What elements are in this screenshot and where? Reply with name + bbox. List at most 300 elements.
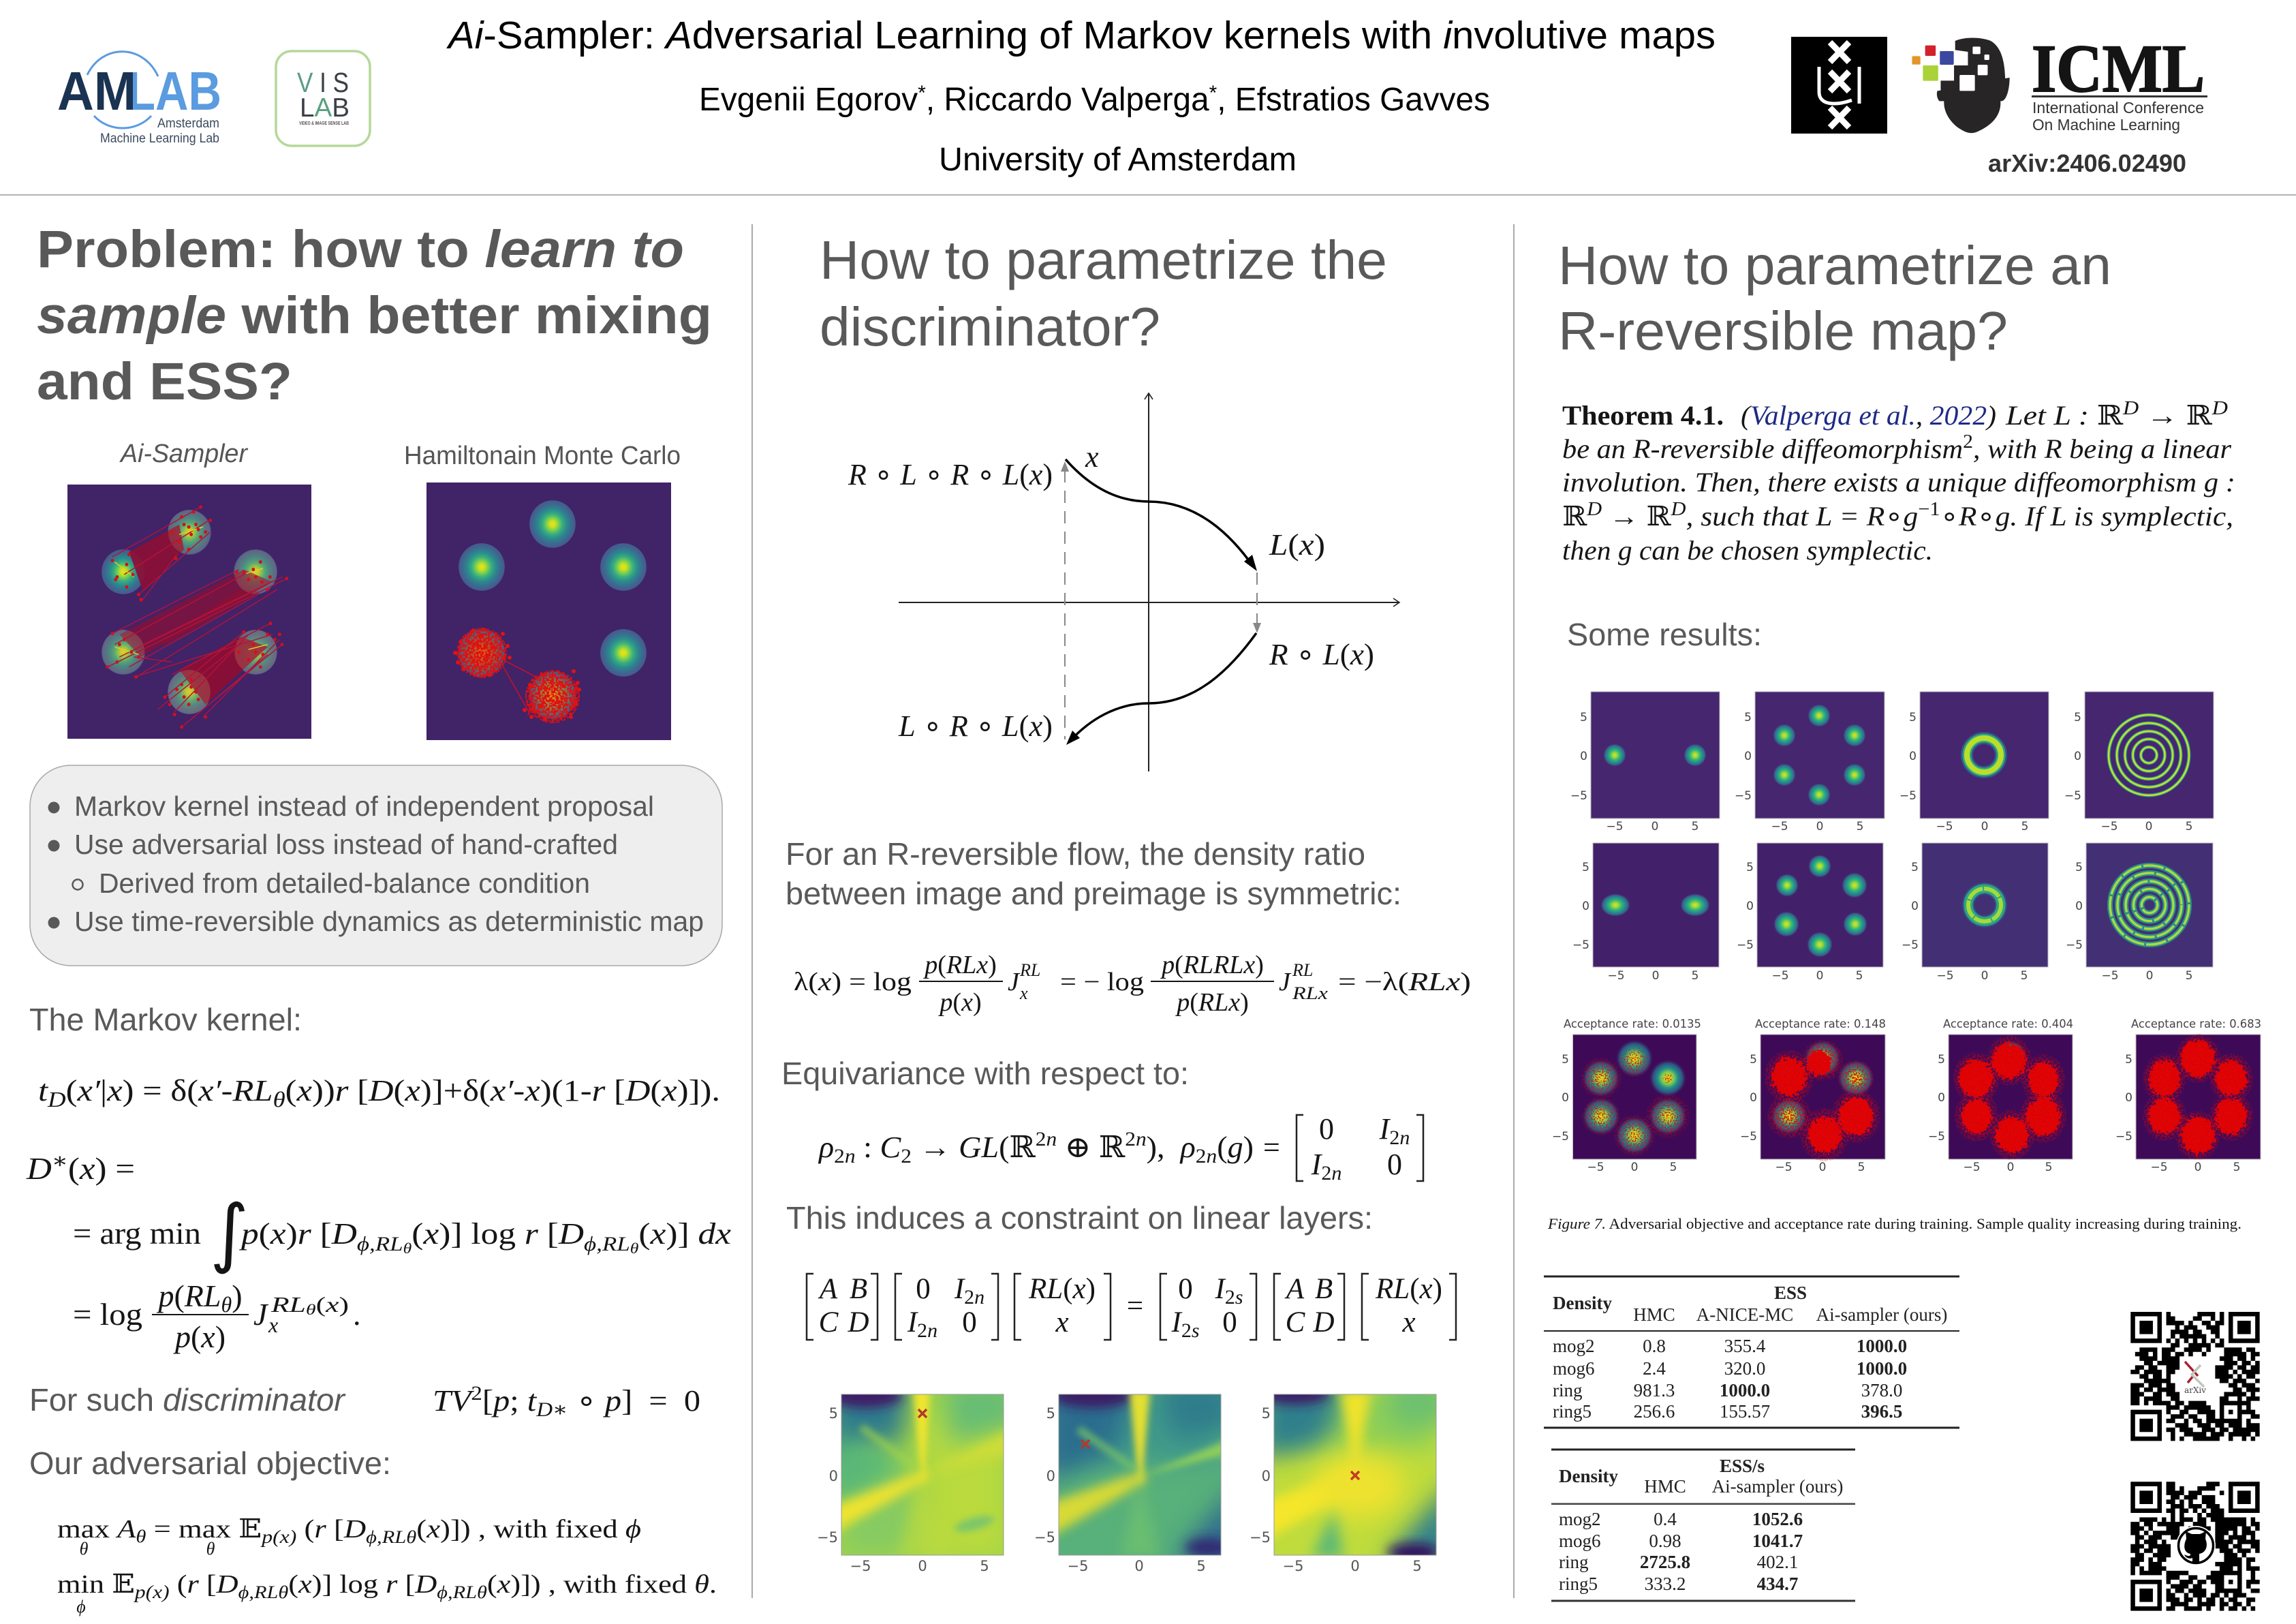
table: ESS: 2.4 [1643,1358,1666,1379]
heading: R-reversible map [1558,235,2111,361]
formula: optimal discriminator: ( [638,1217,651,1251]
table: ESS: 355.4 [1724,1336,1766,1356]
formula: representation: I [1379,1112,1391,1146]
formula: optimal discriminator [26,1148,732,1354]
formula: adversarial objective: r [D [187,1570,235,1599]
formula: adversarial objective: min 𝔼 [57,1570,124,1599]
chart: discriminator heatmap 2: 0 [1134,1558,1144,1574]
table: ESS: HMC [1633,1304,1675,1325]
authors: , Riccardo Valperga [926,82,1209,118]
chart: acceptance rate 0.148: 0 [1819,1161,1826,1174]
chart: target densities (row 1): 0 [1651,820,1658,833]
formula: optimal discriminator: θ [403,1240,412,1257]
diagram: R-reversible flow: L ∘ R ∘ L(x) [898,709,1053,744]
chart: discriminator heatmap 1: 5 [829,1405,838,1422]
logo: ICML wordmark: International Conference [2032,99,2204,117]
chart: target densities (row 1): 0 [1744,750,1752,763]
callout: key ideas: Use adversarial loss instead of hand-crafted [74,829,618,860]
chart: acceptance rate 0.404: 0 [1938,1091,1945,1105]
formula: optimal discriminator: ϕ,RL [584,1233,630,1255]
text: theorem 4.1: ℝ [1562,501,1587,532]
table: ESS per second: ESS/s [1720,1456,1765,1476]
chart: learned densities (row 2): 5 [1582,861,1589,874]
chart: target densities (row 1): −5 [1606,820,1624,833]
chart: target densities (row 1): 5 [1857,820,1863,833]
formula: linear-layer constraint: C [1286,1306,1306,1338]
QR code: GitHub [2130,1482,2260,1611]
caption: figure 7: Figure 7. Adversarial objective and acceptance rate during training. Sample quality increasing during training. [1547,1215,2241,1232]
callout: key ideas: Use time-reversible dynamics as deterministic map [74,906,704,937]
chart: acceptance rate 0.148: 5 [1858,1161,1865,1174]
heading: R-reversible map: How to parametrize an [1558,235,2111,296]
formula: density ratio symmetry: x [1019,983,1028,1003]
formula: optimal discriminator: θ [630,1240,639,1257]
formula: linear-layer constraint: RL(x) [1375,1273,1442,1305]
formula: representation: → [912,1131,959,1164]
formula: adversarial objective: p(x) [134,1582,170,1602]
text: density ratio: between image and preimage is symmetric: [786,876,1401,911]
chart: discriminator heatmap 1 [818,1394,1004,1572]
heading: problem: Problem: how to learn to [37,220,684,279]
chart: target densities (row 1): 5 [2074,711,2081,724]
header [57,14,2207,178]
formula: Markov kernel: D [47,1087,66,1112]
formula: optimal discriminator: x)] dx [651,1217,726,1251]
chart: acceptance rate 0.0135 [1552,1017,1701,1174]
formula: representation: 2n [834,1145,855,1167]
text: theorem 4.1: R∘g. If L is symplectic, [1959,501,2214,532]
formula: Markov kernel: x′|x) = δ( x′-RL [78,1074,268,1107]
formula: adversarial objective: = max 𝔼 [146,1515,262,1544]
formula: representation: 0 [1387,1148,1402,1181]
chart: discriminator heatmap 1: 0 [829,1468,838,1484]
formula: density ratio symmetry: = − log [1060,968,1144,996]
table: ESS: 396.5 [1861,1401,1902,1422]
chart: target densities (row 1) [1570,692,2214,833]
chart: acceptance rate 0.404 [1928,1017,2073,1174]
heading: problem [37,220,712,411]
chart: discriminator heatmap 3: 0 [1262,1468,1271,1484]
logo: VIS LAB: LAB [300,93,350,123]
logo: University of Amsterdam shield [1791,37,1887,134]
chart: learned densities (row 2): 0 [2146,969,2153,983]
chart: Ai-Sampler trajectories [67,485,311,739]
chart: learned densities (row 2): 5 [1692,969,1698,983]
chart: acceptance rate 0.0135: 0 [1562,1091,1569,1105]
text: adversarial objective: Our adversarial objective: [29,1445,391,1481]
chart: target densities (row 1): 0 [1580,750,1587,763]
logo: VIS LAB: VIDEO & IMAGE SENSE LAB [299,120,349,126]
chart: discriminator heatmap 3: 0 [1350,1558,1360,1574]
arXiv id: arXiv:2406.02490 [1988,149,2186,177]
formula: adversarial objective: p(x) [260,1527,296,1547]
heading: discriminator: How to parametrize the [820,230,1387,290]
chart: HMC trajectories [426,482,671,740]
label: Ai-Sampler: Ai-Sampler [119,440,248,468]
table: ESS: A-NICE-MC [1696,1304,1793,1325]
formula: linear-layer constraint: 0 [962,1306,977,1338]
formula: representation: 2n [1125,1128,1146,1150]
chart: acceptance rate 0.0135: 5 [1670,1161,1677,1174]
chart: discriminator heatmap 3: 5 [1262,1405,1271,1422]
panel: problem and kernel (left column) [26,220,732,1617]
formula: linear-layer constraint: 2n [964,1286,984,1308]
formula: total variation: p; t [493,1384,536,1418]
chart: target densities (row 1): 5 [2021,820,2028,833]
text: theorem 4.1: D [1586,499,1602,520]
chart: learned densities (row 2): −5 [2066,938,2083,952]
text: theorem 4.1: then g can be chosen symplectic. [1562,535,1933,566]
chart: target densities (row 1): −5 [2100,820,2118,833]
chart: target densities (row 1): 5 [1909,711,1917,724]
formula: representation: g) [1228,1131,1253,1164]
diagram: R-reversible flow: x [1085,440,1099,474]
table: ESS: mog6 [1553,1358,1595,1379]
title: Ai-Sampler: Adversarial Learning of Markov kernels with involutive maps [446,14,1716,57]
chart: target densities (row 1): 5 [2186,820,2192,833]
chart: target densities (row 1): 0 [2074,750,2081,763]
formula: total variation: ∘ p] = 0 [576,1383,694,1418]
chart: learned densities (row 2): −5 [1607,969,1625,983]
chart: acceptance rate 0.0135: 0 [1631,1161,1638,1174]
table: ESS per second: 2725.8 [1640,1552,1690,1572]
text: theorem 4.1: D [2212,398,2228,419]
label: Hamiltonian Monte Carlo: Hamiltonain Monte Carlo [404,442,681,470]
formula: density ratio symmetry: p(x) [937,988,982,1017]
formula: linear-layer constraint: C [819,1306,839,1338]
diagram: R-reversible flow: R ∘ L ∘ R ∘ L(x) [848,457,1053,492]
table: ESS: ring5 [1553,1401,1592,1422]
formula: linear-layer constraint: 2n [917,1319,937,1342]
authors: Evgenii Egorov [699,82,919,118]
table: ESS [1544,1276,1959,1428]
chart: learned densities (row 2): 0 [1816,969,1823,983]
chart: discriminator heatmap 2: −5 [1068,1558,1088,1574]
logo: VIS LAB [276,51,370,146]
formula: density ratio symmetry: J [1008,968,1021,996]
chart: discriminator heatmap 2: 5 [1196,1558,1206,1574]
formula: representation: 2n [1389,1127,1410,1149]
chart: discriminator heatmap 2: −5 [1034,1529,1055,1546]
table: ESS: 155.57 [1720,1401,1770,1422]
text: density ratio: For an R-reversible flow, the density ratio [786,836,1365,872]
text: theorem 4.1: → ℝ [1602,501,1671,532]
chart: target densities (row 1): −5 [1771,820,1788,833]
chart: discriminator heatmap 3: 5 [1412,1558,1422,1574]
formula: optimal discriminator: ∫ [210,1189,249,1276]
formula: optimal discriminator: RL [271,1292,296,1317]
formula: Markov kernel: ( [66,1074,78,1107]
text: constraint on linear layers: This induces a constraint on linear layers: [786,1200,1373,1236]
text: some results: Some results: [1567,617,1762,652]
formula: optimal discriminator: θ [221,1292,232,1317]
table: ESS per second: 434.7 [1757,1574,1798,1594]
table: ESS per second: 0.4 [1654,1509,1677,1529]
formula: adversarial objective: θ [80,1539,89,1559]
chart: target densities (row 1): 5 [1580,711,1587,724]
chart: learned densities (row 2): 5 [2186,969,2192,983]
affiliation: University of Amsterdam [939,142,1297,178]
table: ESS per second: 1041.7 [1752,1531,1803,1551]
formula: optimal discriminator: ) [232,1278,243,1313]
formula: optimal discriminator: x) [326,1292,346,1317]
table: ESS per second: Ai-sampler (ours) [1712,1476,1843,1497]
formula: adversarial objective: r [D [314,1515,362,1544]
chart: acceptance rate 0.683: 5 [2125,1053,2132,1067]
chart: discriminator heatmap 2 [1036,1394,1221,1572]
formula: adversarial objective: ϕ,RLθ [437,1582,487,1602]
text: for such discriminator: For such discriminator [29,1382,346,1418]
heading: discriminator: discriminator? [820,296,1160,357]
formula: linear-layer constraint: I [954,1273,965,1305]
table: ESS: 1000.0 [1857,1358,1907,1379]
formula: adversarial objective: ϕ [76,1597,86,1617]
formula: representation: ), [1147,1131,1181,1164]
formula: representation: 0 [1319,1112,1334,1146]
formula: adversarial objective: θ [206,1539,215,1559]
logo: AMLAB: AM [57,61,136,121]
text: theorem 4.1: 2 [1963,431,1973,453]
chart: learned densities (row 2): 0 [1652,969,1659,983]
formula: density ratio symmetry: RL [1019,960,1040,980]
formula: adversarial objective [57,1515,717,1617]
formula: linear-layer constraint: D [1312,1306,1335,1338]
chart: acceptance rate 0.404: −5 [1963,1161,1981,1174]
formula: linear-layer constraint: B [850,1273,867,1305]
table: ESS: 981.3 [1634,1380,1675,1400]
text: theorem 4.1: D [1670,499,1686,520]
formula: adversarial objective: ( [487,1570,497,1599]
formula: Markov kernel: ( [285,1074,297,1107]
formula: representation: 2 [901,1145,912,1167]
formula: density ratio symmetry: J [1279,968,1292,996]
formula: representation: ρ [818,1131,834,1164]
chart: acceptance rate 0.404: 5 [1938,1053,1945,1067]
table: ESS per second: ring [1559,1552,1589,1572]
formula: adversarial objective: ( [288,1570,298,1599]
chart: acceptance rate 0.148: Acceptance rate: 0.148 [1755,1017,1886,1031]
formula: adversarial objective: ( [416,1515,426,1544]
text: theorem 4.1: → ℝ [2139,400,2213,431]
formula: linear-layer constraint: RL(x) [1028,1273,1096,1305]
table: ESS: 378.0 [1861,1380,1902,1400]
formula: representation: 2n [1321,1162,1341,1184]
heading: discriminator [820,230,1387,357]
text: equivariance: Equivariance with respect to: [781,1056,1189,1091]
chart: acceptance rate 0.0135: −5 [1552,1130,1569,1144]
callout: key ideas: Derived from detailed-balance condition [99,868,590,899]
table: ESS: Density [1553,1293,1612,1313]
formula: optimal discriminator: x) = [80,1151,131,1186]
logo: AMLAB: Amsterdam [157,117,219,131]
formula: density ratio symmetry: RLx [1292,983,1329,1003]
text: density ratio [786,836,1401,911]
chart: discriminator heatmap 1: 5 [980,1558,989,1574]
table: ESS per second: Density [1559,1466,1618,1486]
table: ESS: 1000.0 [1857,1336,1907,1356]
chart: learned densities (row 2): 0 [1911,900,1919,913]
chart: acceptance rate 0.148: 5 [1750,1053,1757,1067]
formula: density ratio symmetry: p(RLRLx) [1160,951,1264,979]
chart: target densities (row 1): 0 [1816,820,1823,833]
formula: density ratio symmetry: λ(x) = log [794,968,912,996]
formula: optimal discriminator: x [268,1313,278,1337]
chart: discriminator heatmap 2: 5 [1046,1405,1055,1422]
formula: adversarial objective: ( [296,1515,314,1544]
text: theorem 4.1: D [2122,398,2139,419]
chart: learned densities (row 2): 5 [2075,861,2083,874]
table: ESS: 1000.0 [1720,1380,1770,1400]
formula: linear-layer constraint [807,1273,1456,1342]
formula: representation: ρ [1179,1131,1196,1164]
formula: density ratio symmetry [794,951,1471,1017]
table: ESS: mog2 [1553,1336,1595,1356]
text: the Markov kernel: The Markov kernel: [29,1002,302,1037]
formula: linear-layer constraint: 2s [1225,1286,1243,1308]
QR code: arXiv: arXiv [2184,1385,2206,1395]
table: ESS: Ai-sampler (ours) [1816,1304,1947,1325]
chart: learned densities (row 2) [1572,843,2213,983]
chart: learned densities (row 2): 0 [1746,900,1754,913]
table: ESS per second: ring5 [1559,1574,1598,1594]
chart: target densities (row 1): 0 [1909,750,1917,763]
formula: representation: 2n [1036,1128,1056,1150]
chart: learned densities (row 2): 0 [1582,900,1589,913]
text: theorem 4.1: Theorem 4.1. [1562,400,1724,431]
formula: optimal discriminator: D [26,1151,52,1186]
formula: adversarial objective: ϕ,RLθ [238,1582,289,1602]
formula: representation: ⊕ ℝ [1057,1131,1126,1164]
table: ESS per second: 0.98 [1649,1531,1681,1551]
text: theorem 4.1: Let L : ℝ [2006,400,2120,431]
text: theorem 4.1: , with R being a linear [1973,433,2231,464]
formula: linear-layer constraint: I [907,1306,918,1338]
logo: ICML wordmark: On Machine Learning [2032,116,2180,134]
table: ESS per second: 333.2 [1645,1574,1686,1594]
chart: discriminator heatmap 1: −5 [817,1529,838,1546]
panel: discriminator (middle column) [781,230,1471,1574]
chart: target densities (row 1): 0 [1981,820,1988,833]
formula: linear-layer constraint: I [1214,1273,1226,1305]
logo: AMLAB: Machine Learning Lab [100,132,219,146]
chart: acceptance rate 0.683: −5 [2150,1161,2168,1174]
formula: linear-layer constraint: = [1127,1290,1143,1322]
callout: key ideas: Markov kernel instead of independent proposal [74,791,654,822]
formula: optimal discriminator: J [253,1297,269,1332]
chart: discriminator heatmap 1: 0 [918,1558,927,1574]
chart: target densities (row 1): −5 [1735,789,1752,803]
chart: learned densities (row 2): 5 [2021,969,2028,983]
chart: target densities (row 1): 0 [2145,820,2152,833]
chart: discriminator heatmap 1: −5 [850,1558,871,1574]
formula: Markov kernel: x))r [D(x)]+δ( x′-x)(1-r [D(x)]). [297,1074,715,1107]
formula: Markov kernel: t [38,1074,49,1107]
chart: discriminator heatmap 2: 0 [1046,1468,1055,1484]
chart: learned densities (row 2): −5 [2101,969,2119,983]
chart: acceptance rate 0.148: −5 [1740,1130,1757,1144]
chart: acceptance rate 0.148: −5 [1775,1161,1793,1174]
chart: acceptance rate 0.683: 0 [2125,1091,2132,1105]
chart: acceptance rate 0.683: 5 [2233,1161,2240,1174]
chart: discriminator heatmap 3: −5 [1283,1558,1303,1574]
chart: acceptance rate 0.0135: 5 [1562,1053,1569,1067]
formula: Markov kernel: θ [273,1087,285,1112]
formula: representation [818,1112,1423,1184]
chart: acceptance rate 0.404: 0 [2007,1161,2014,1174]
formula: adversarial objective: x)]) , with fixed ϕ [426,1515,639,1544]
logo: AMLAB [57,52,221,146]
chart: learned densities (row 2): −5 [1902,938,1919,952]
formula: linear-layer constraint: 0 [1178,1273,1193,1305]
chart: target densities (row 1): 5 [1744,711,1752,724]
formula: density ratio symmetry: RL [1292,960,1313,980]
chart: acceptance rate 0.0135: −5 [1587,1161,1604,1174]
formula: adversarial objective: θ [136,1527,146,1546]
authors: * [918,82,926,104]
table: ESS per second: mog2 [1559,1509,1601,1529]
table: ESS: 0.8 [1643,1336,1666,1356]
formula: representation: ( [1217,1131,1228,1164]
formula: total variation: TV [433,1384,475,1418]
heading: problem: and ESS? [37,352,292,411]
authors: , Efstratios Gavves [1217,82,1490,118]
formula: representation: = [1263,1131,1280,1164]
formula: adversarial objective: max A [57,1515,133,1544]
heading: problem: sample with better mixing [37,286,712,345]
formula: optimal discriminator: . [353,1297,361,1332]
chart: acceptance rate 0.404: Acceptance rate: 0.404 [1943,1017,2073,1031]
chart: learned densities (row 2): 5 [1746,861,1754,874]
text: theorem 4.1: ∘ [1940,501,1959,532]
text: theorem 4.1: , such that L = R [1686,501,1884,532]
formula: density ratio symmetry: p(RLx) [922,951,997,979]
formula: optimal discriminator: ( [68,1151,80,1186]
formula: adversarial objective: ( [170,1570,187,1599]
table: ESS per second: 1052.6 [1752,1509,1803,1529]
formula: optimal discriminator: x)] log r [D [423,1217,580,1251]
table: ESS: ESS [1774,1283,1807,1303]
formula: optimal discriminator: p(x) [173,1319,226,1354]
formula: adversarial objective: ϕ,RLθ [366,1527,417,1547]
formula: representation: 2n [1196,1145,1216,1167]
formula: density ratio symmetry: p(RLx) [1175,988,1249,1017]
chart: acceptance rate 0.683: 0 [2194,1161,2201,1174]
formula: optimal discriminator: ( [316,1292,326,1317]
formula: optimal discriminator: θ [306,1301,316,1318]
chart: acceptance rate 0.683: Acceptance rate: 0.683 [2131,1017,2261,1031]
chart: learned densities (row 2): 0 [1981,969,1988,983]
formula: total variation: D∗ [536,1398,568,1421]
diagram: R-reversible flow [848,393,1399,771]
formula: optimal discriminator: = log [73,1297,142,1332]
formula: linear-layer constraint: x [1055,1306,1069,1338]
formula: density ratio symmetry: = −λ( RLx ) [1338,968,1471,996]
chart: learned densities (row 2): −5 [1936,969,1954,983]
table: ESS per second: mog6 [1559,1531,1601,1551]
chart: target densities (row 1): −5 [1936,820,1953,833]
logo: VIS LAB: V I S [297,67,349,98]
chart: discriminator heatmap 3 [1251,1394,1436,1572]
formula: optimal discriminator: p(x)r [D [241,1217,354,1251]
logo: ICML wordmark: ICML [2032,31,2205,106]
formula: optimal discriminator: p(RL [158,1278,221,1313]
formula: total variation: 2 [471,1382,482,1405]
table: ESS: 256.6 [1634,1401,1675,1422]
chart: learned densities (row 2): 5 [1856,969,1863,983]
formula: linear-layer constraint: B [1315,1273,1333,1305]
chart: acceptance rate 0.0135: Acceptance rate: 0.0135 [1564,1017,1701,1031]
text: theorem 4.1: ∘g [1884,501,1917,532]
